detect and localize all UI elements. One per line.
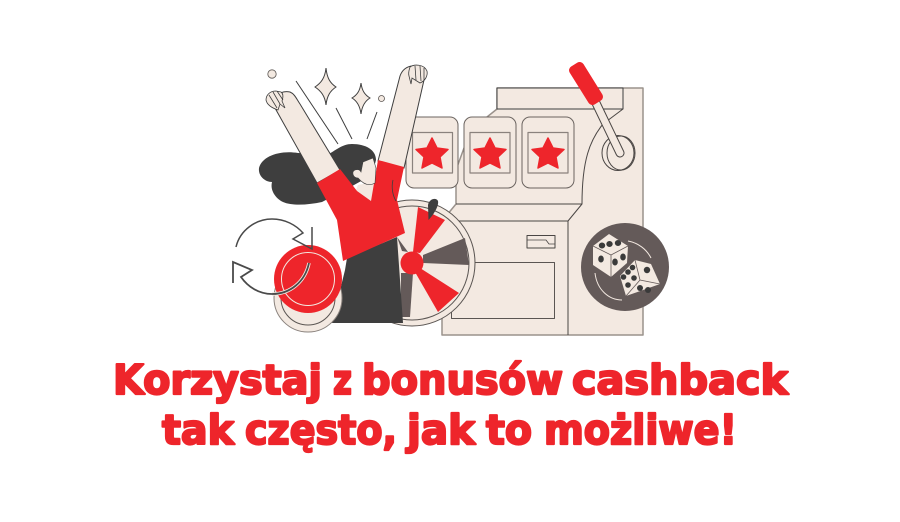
heading	[113, 356, 790, 454]
reel 1	[406, 117, 458, 188]
heading: cashback	[572, 356, 790, 404]
prize wheel	[349, 199, 475, 326]
machine body	[442, 88, 643, 335]
heading: to	[486, 406, 532, 454]
wheel pointer	[428, 199, 438, 220]
sparkle small	[352, 83, 370, 114]
sparkle large	[315, 68, 336, 105]
motion lines	[296, 81, 377, 144]
neck and chest	[355, 183, 374, 202]
sparkles and motion lines	[268, 68, 384, 144]
icon: dice badge	[581, 223, 669, 311]
wheel hub	[400, 252, 424, 274]
heading: jak	[405, 406, 477, 454]
heading: często,	[245, 406, 397, 454]
circle decoration right	[378, 96, 384, 102]
right arm	[378, 66, 424, 168]
hair	[259, 144, 376, 205]
die 2	[620, 260, 660, 296]
shirt fold	[392, 180, 396, 201]
left arm	[274, 92, 340, 183]
circle decoration left	[268, 70, 276, 78]
heading: możliwe!	[544, 406, 737, 454]
shirt	[317, 160, 405, 261]
wheel wedges	[413, 207, 445, 253]
heading: Korzystaj	[113, 356, 322, 404]
coin	[274, 245, 342, 332]
reel 2	[464, 117, 516, 188]
reel 3	[522, 117, 574, 188]
right fist	[409, 65, 427, 84]
machine top panel	[497, 88, 623, 109]
coin slot	[527, 236, 555, 248]
heading: z	[333, 356, 352, 404]
lever	[574, 66, 635, 170]
machine side contour	[442, 109, 623, 335]
heading: bonusów	[362, 356, 563, 404]
face	[353, 158, 376, 185]
dispensing tray	[452, 262, 554, 318]
die 1	[593, 234, 628, 277]
reels	[406, 117, 574, 188]
icon: refresh arrows	[233, 219, 312, 294]
left fist	[266, 91, 285, 110]
heading: tak	[162, 406, 236, 454]
person	[259, 65, 427, 323]
slot machine	[406, 66, 643, 335]
skirt	[332, 237, 403, 323]
